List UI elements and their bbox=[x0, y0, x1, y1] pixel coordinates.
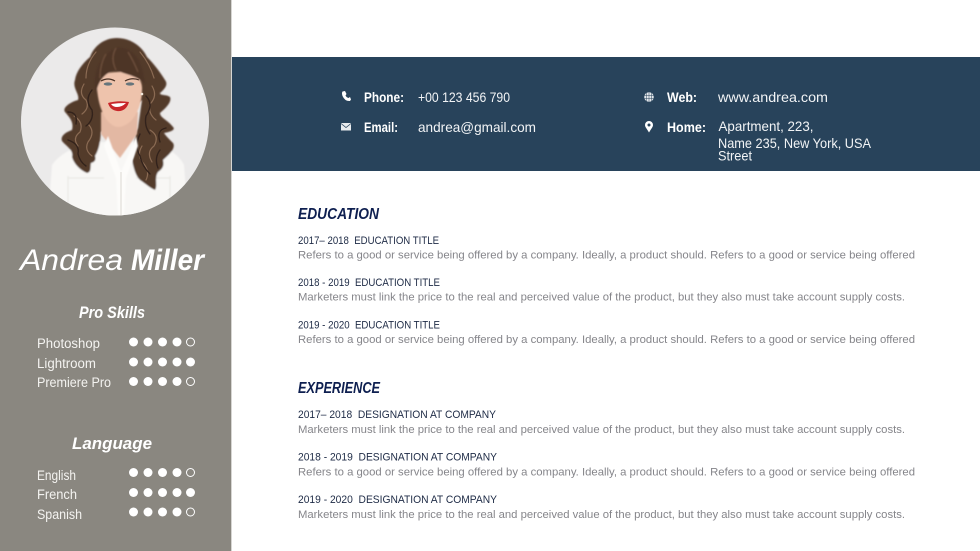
phone contact: Phone: bbox=[364, 90, 404, 105]
home contact bbox=[667, 118, 872, 164]
web contact: www.andrea.com bbox=[717, 89, 828, 105]
experience entry 1: Marketers must link the price to the real and perceived value of the product, but they also must take account supply costs. bbox=[298, 424, 905, 436]
phone contact: +00 123 456 790 bbox=[418, 89, 510, 105]
heading: education: EDUCATION bbox=[298, 206, 380, 223]
education entry 3: Refers to a good or service being offered by a company. Ideally, a product should. Refers to a good or service being offered bbox=[298, 334, 915, 346]
skill: Photoshop: Photoshop bbox=[37, 336, 100, 351]
web contact bbox=[667, 89, 828, 105]
icon: envelope bbox=[341, 123, 351, 130]
experience entry 3 bbox=[298, 494, 905, 521]
language: English: English bbox=[37, 468, 76, 483]
education entry 3: 2019 - 2020 EDUCATION TITLE bbox=[298, 320, 440, 332]
heading: language: Language bbox=[72, 435, 152, 453]
skill: Lightroom: Lightroom bbox=[37, 356, 96, 371]
education entry 2 bbox=[298, 277, 905, 304]
panel: education bbox=[298, 206, 915, 346]
phone contact bbox=[364, 89, 510, 105]
skill: Premiere Pro: Premiere Pro bbox=[37, 375, 111, 390]
heading: pro skills: Pro Skills bbox=[79, 304, 145, 322]
education entry 1: Refers to a good or service being offered by a company. Ideally, a product should. Refers to a good or service being offered bbox=[298, 250, 915, 262]
experience entry 2: 2018 - 2019 DESIGNATION AT COMPANY bbox=[298, 452, 497, 464]
language list bbox=[37, 468, 195, 522]
education entry 3 bbox=[298, 320, 915, 346]
education entry 1 bbox=[298, 235, 915, 262]
home contact: Street bbox=[718, 148, 752, 164]
home contact: Name 235, New York, USA bbox=[718, 135, 872, 151]
name: Miller bbox=[131, 244, 206, 277]
language: English bbox=[37, 468, 194, 483]
experience entry 3: 2019 - 2020 DESIGNATION AT COMPANY bbox=[298, 494, 497, 506]
education entry 2: Marketers must link the price to the real and perceived value of the product, but they also must take account supply costs. bbox=[298, 292, 905, 304]
icon: globe bbox=[644, 92, 654, 102]
language: Spanish bbox=[37, 507, 194, 522]
panel: experience bbox=[298, 380, 915, 521]
experience entry 2 bbox=[298, 452, 915, 478]
experience entry 3: Marketers must link the price to the real and perceived value of the product, but they also must take account supply costs. bbox=[298, 509, 905, 521]
skill: Lightroom bbox=[37, 356, 195, 371]
skill list bbox=[37, 336, 195, 390]
email contact: andrea@gmail.com bbox=[418, 119, 536, 135]
web contact: Web: bbox=[667, 90, 697, 105]
panel: contact band bbox=[232, 57, 980, 171]
photo: portrait of Andrea Miller bbox=[21, 27, 209, 217]
email contact bbox=[364, 119, 536, 135]
home contact: Home: bbox=[667, 120, 706, 135]
panel: sidebar bbox=[0, 0, 232, 551]
email contact: Email: bbox=[364, 120, 398, 135]
language: French bbox=[37, 487, 195, 502]
education entry 2: 2018 - 2019 EDUCATION TITLE bbox=[298, 277, 440, 289]
experience entry 1 bbox=[298, 409, 905, 436]
education entry 1: 2017– 2018 EDUCATION TITLE bbox=[298, 235, 439, 247]
language: Spanish: Spanish bbox=[37, 507, 82, 522]
home contact: Apartment, 223, bbox=[718, 118, 814, 134]
icon: map pin bbox=[645, 121, 653, 132]
language: French: French bbox=[37, 487, 77, 502]
name bbox=[18, 244, 206, 277]
experience entry 2: Refers to a good or service being offered by a company. Ideally, a product should. Refers to a good or service being offered bbox=[298, 466, 915, 478]
skill: Photoshop bbox=[37, 336, 194, 351]
experience entry 1: 2017– 2018 DESIGNATION AT COMPANY bbox=[298, 409, 496, 421]
heading: experience: EXPERIENCE bbox=[298, 380, 381, 397]
icon: phone bbox=[342, 91, 351, 101]
name: Andrea bbox=[18, 244, 123, 277]
skill: Premiere Pro bbox=[37, 375, 194, 390]
